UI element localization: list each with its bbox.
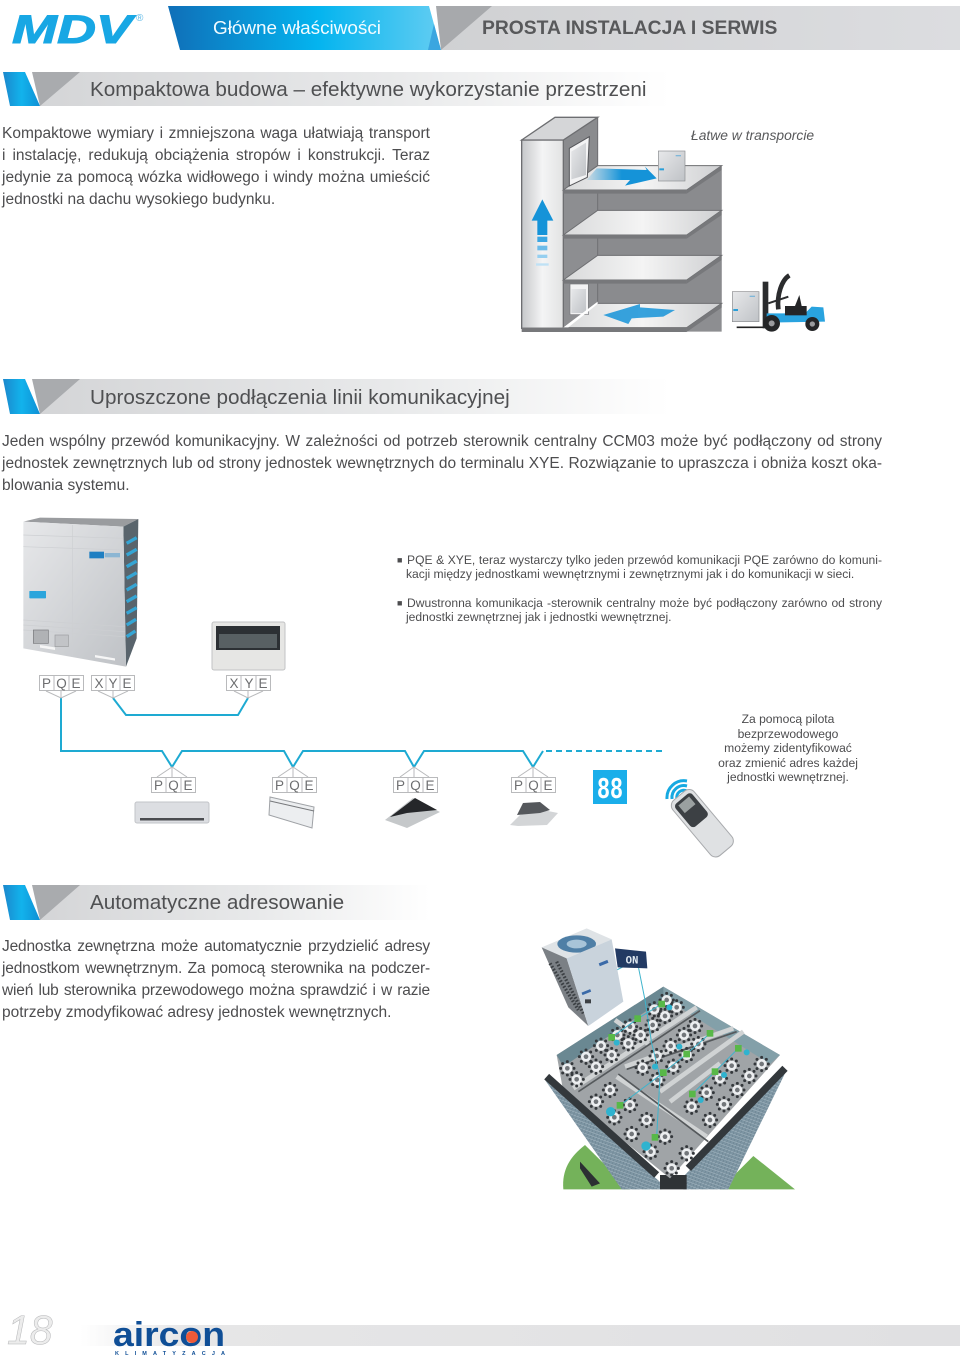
text block: compact design: jedynie za pomocą wózka widłowego i windy można umieścić [2, 169, 430, 186]
terminal labels: Y [244, 676, 254, 691]
bullet notes: Dwustronna komunikacja -sterownik centralny może być podłączony zarówno od strony [407, 596, 882, 610]
text block: auto addressing: Jednostka zewnętrzna może automatycznie przydzielić adresy [2, 938, 430, 955]
caption: wireless remote: możemy zidentyfikować [724, 741, 852, 755]
header bar [12, 6, 960, 52]
footer band [114, 1325, 960, 1346]
bullet notes: ■ [397, 555, 402, 565]
logo: MDV: MDV [12, 8, 136, 52]
ON sign: ON [626, 955, 638, 967]
page title: PROSTA INSTALACJA I SERWIS [482, 18, 777, 39]
outdoor unit [23, 518, 138, 667]
bullet notes [397, 553, 882, 624]
terminal labels: E [425, 778, 435, 793]
wiring diagram [39, 675, 662, 793]
doorway units [563, 137, 598, 327]
wall unit [135, 802, 209, 823]
bullet notes: jednostki zewnętrznej jak i jednostki wewnętrznej. [406, 610, 672, 624]
terminal labels: E [71, 676, 81, 691]
caption: wireless remote: jednostki wewnętrznej. [727, 770, 849, 784]
outdoor unit on top [542, 928, 623, 1026]
text block: auto addressing [2, 938, 430, 1021]
terminal labels: X [229, 676, 239, 691]
walls [563, 117, 722, 332]
caption: wireless remote: Za pomocą pilota [742, 712, 834, 726]
ceiling unit [269, 797, 314, 828]
bullet notes: ■ [397, 598, 402, 608]
terminal labels: P [42, 676, 51, 691]
four-way cassette [510, 802, 558, 826]
section heading: Automatyczne adresowanie [3, 885, 368, 920]
network cables and markers [606, 960, 750, 1151]
terminal boxes [40, 676, 556, 792]
roof [547, 987, 785, 1178]
bullet notes: PQE & XYE, teraz wystarczy tylko jeden przewód komunikacji PQE zarówno do komuni- [407, 553, 882, 567]
terminal labels: X [94, 676, 104, 691]
ON sign [615, 948, 647, 968]
text block: compact design: jednostki na dachu wysokiego budynku. [2, 191, 275, 208]
roof unit [658, 151, 685, 181]
terminal labels [42, 676, 553, 793]
facades [545, 1070, 787, 1189]
rooftop indoor units [559, 992, 770, 1176]
forklift with unit [732, 275, 825, 332]
section heading: Automatyczne adresowanie: Automatyczne adresowanie [90, 891, 344, 914]
caption: wireless remote [718, 712, 858, 784]
page number: 18 [7, 1307, 53, 1353]
caption: wireless remote: bezprzewodowego [738, 726, 838, 740]
section heading: Uproszczone podłączenia: Uproszczone podłączenia linii komunikacyjnej [90, 386, 510, 409]
terminal labels: Q [289, 778, 300, 793]
tower rooftop illustration [542, 928, 795, 1190]
terminal labels: P [154, 778, 163, 793]
text block: compact design [2, 125, 430, 208]
indoor units [134, 796, 558, 829]
logo: MDV: ® [136, 13, 144, 24]
logo: MDV [12, 8, 144, 52]
terminal labels: E [543, 778, 553, 793]
terminal labels: E [183, 778, 193, 793]
logo: aircon: aircon [113, 1316, 225, 1354]
logo: aircon: KLIMATYZACJA [115, 1351, 225, 1357]
terminal labels: E [258, 676, 268, 691]
connector lines [46, 691, 548, 777]
terminal labels: P [396, 778, 405, 793]
text block: communication line: blowania systemu. [2, 477, 130, 494]
section heading: Kompaktowa budowa: Kompaktowa budowa – efektywne wykorzystanie przestrzeni [90, 78, 647, 101]
ground [563, 1145, 795, 1189]
terminal labels: E [122, 676, 132, 691]
text block: auto addressing: jednostkom wewnętrznym. Za pomocą sterownika na podczer- [2, 960, 430, 977]
terminal labels: P [275, 778, 284, 793]
caption: wireless remote: oraz zmienić adres każdej [718, 756, 858, 770]
section heading: Kompaktowa budowa [3, 72, 647, 106]
terminal labels: Q [168, 778, 179, 793]
text block: communication line [2, 433, 882, 494]
ribbons [168, 6, 960, 50]
terminal labels: Q [410, 778, 421, 793]
caption: easy transport: Łatwe w transporcie [691, 127, 814, 143]
terminal labels: Q [528, 778, 539, 793]
text block: auto addressing: wień lub sterownika przewodowego można sprawdzić i w razie [2, 982, 430, 999]
text block: communication line: jednostek zewnętrznych lub od strony jednostek wewnętrznych do terminalu XYE. Rozwiązanie to upraszcza i obniża koszt oka- [2, 455, 882, 472]
terminal labels: Q [56, 676, 67, 691]
ribbon title: Główne właściwości [213, 18, 381, 39]
cable lines [61, 698, 662, 767]
building transport diagram [520, 116, 825, 332]
text block: compact design: Kompaktowe wymiary i zmniejszona waga ułatwiają transport [2, 125, 430, 142]
elevator shaft [522, 117, 598, 328]
arrows [532, 167, 675, 324]
one-way cassette [385, 798, 440, 828]
central controller [212, 622, 286, 670]
text block: compact design: i instalację, redukują obciążenia stropów i konstrukcji. Teraz [2, 147, 430, 164]
terminal labels: E [304, 778, 314, 793]
text block: communication line: Jeden wspólny przewód komunikacyjny. W zależności od potrzeb sterownik centralny CCM03 może być podłączony od strony [2, 433, 882, 450]
section heading: Uproszczone podłączenia [3, 379, 570, 414]
bullet notes: kacji między jednostkami wewnętrznymi i zewnętrznymi jak i do komunikacji w sieci. [406, 567, 854, 581]
text block: auto addressing: potrzeby zmodyfikować adresy jednostek wewnętrznych. [2, 1004, 391, 1021]
icon: wireless remote [665, 779, 734, 858]
floors [522, 166, 722, 332]
terminal labels: P [514, 778, 523, 793]
terminal labels: Y [108, 676, 118, 691]
